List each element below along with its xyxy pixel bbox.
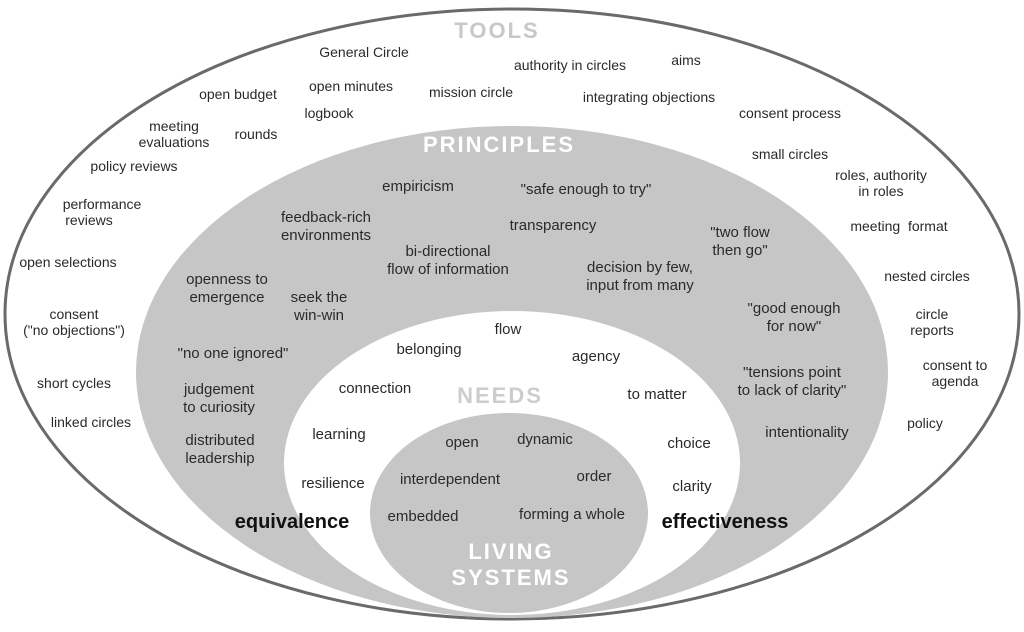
principles labels: "safe enough to try" xyxy=(521,181,651,198)
principles labels: "good enough xyxy=(748,300,840,317)
heading: living systems: LIVING xyxy=(468,539,554,564)
needs labels: connection xyxy=(339,380,411,397)
tools labels: in roles xyxy=(858,183,904,199)
needs labels: choice xyxy=(667,435,711,452)
tools labels: ("no objections") xyxy=(23,322,125,338)
tools labels: aims xyxy=(671,52,701,68)
tools labels: open selections xyxy=(19,254,117,270)
needs labels: agency xyxy=(572,348,621,365)
tools labels: meeting format xyxy=(850,218,948,234)
tools labels: General Circle xyxy=(319,44,409,60)
emphasized words: effectiveness xyxy=(662,511,788,533)
principles labels: then go" xyxy=(712,242,768,259)
principles labels: distributed xyxy=(185,432,255,449)
principles labels: intentionality xyxy=(765,424,849,441)
needs labels xyxy=(301,321,712,495)
tools labels: mission circle xyxy=(429,84,513,100)
principles labels: leadership xyxy=(185,450,255,467)
principles labels xyxy=(178,178,849,467)
needs labels: clarity xyxy=(672,478,712,495)
living systems labels xyxy=(388,431,625,525)
principles labels: to curiosity xyxy=(183,399,255,416)
heading: tools: TOOLS xyxy=(454,18,540,43)
tools labels: roles, authority xyxy=(835,167,927,183)
heading: living systems: SYSTEMS xyxy=(451,565,571,590)
tools labels: linked circles xyxy=(51,414,131,430)
tools labels: integrating objections xyxy=(583,89,715,105)
tools labels: circle xyxy=(916,306,949,322)
tools labels: short cycles xyxy=(37,375,111,391)
tools labels: reviews xyxy=(65,212,113,228)
emphasized words: equivalence xyxy=(235,511,349,533)
principles labels: feedback-rich xyxy=(281,209,371,226)
principles labels: judgement xyxy=(183,381,255,398)
needs labels: belonging xyxy=(396,341,462,358)
tools labels: reports xyxy=(910,322,954,338)
heading: living systems xyxy=(451,539,571,590)
tools labels: meeting xyxy=(149,118,199,134)
tools labels: logbook xyxy=(304,105,355,121)
living systems labels: open xyxy=(445,434,479,451)
tools labels: consent process xyxy=(739,105,841,121)
living systems labels: forming a whole xyxy=(519,506,625,523)
tools labels: policy reviews xyxy=(90,158,178,174)
tools labels: performance xyxy=(63,196,142,212)
tools labels: authority in circles xyxy=(514,57,626,73)
principles labels: openness to xyxy=(186,271,268,288)
needs labels: to matter xyxy=(627,386,687,403)
principles labels: "tensions point xyxy=(743,364,842,381)
tools labels: nested circles xyxy=(884,268,970,284)
tools labels: consent xyxy=(49,306,99,322)
principles labels: flow of information xyxy=(387,261,509,278)
living systems labels: embedded xyxy=(388,508,458,525)
principles labels: decision by few, xyxy=(587,259,693,276)
principles labels: to lack of clarity" xyxy=(738,382,846,399)
needs ellipse xyxy=(284,311,740,615)
tools labels: agenda xyxy=(932,373,979,389)
tools labels: consent to xyxy=(923,357,988,373)
principles labels: "no one ignored" xyxy=(178,345,288,362)
tools labels: policy xyxy=(907,415,943,431)
tools labels: open budget xyxy=(199,86,277,102)
tools labels: evaluations xyxy=(139,134,209,150)
principles labels: win-win xyxy=(293,307,344,324)
tools labels: open minutes xyxy=(309,78,393,94)
emphasized words xyxy=(235,511,788,533)
principles labels: input from many xyxy=(586,277,694,294)
living systems labels: interdependent xyxy=(400,471,501,488)
principles ellipse xyxy=(136,126,888,618)
living systems ellipse xyxy=(370,413,648,613)
tools labels xyxy=(19,44,988,431)
principles labels: seek the xyxy=(291,289,347,306)
principles labels: bi-directional xyxy=(405,243,491,260)
needs labels: resilience xyxy=(301,475,365,492)
principles labels: "two flow xyxy=(710,224,770,241)
principles labels: for now" xyxy=(767,318,821,335)
principles labels: transparency xyxy=(510,217,597,234)
principles labels: environments xyxy=(281,227,371,244)
principles labels: empiricism xyxy=(382,178,454,195)
heading: needs: NEEDS xyxy=(457,383,543,408)
needs labels: learning xyxy=(312,426,366,443)
living systems labels: dynamic xyxy=(517,431,573,448)
needs labels: flow xyxy=(495,321,521,338)
tools labels: small circles xyxy=(752,146,828,162)
living systems labels: order xyxy=(576,468,612,485)
tools labels: rounds xyxy=(235,126,277,142)
principles labels: emergence xyxy=(189,289,265,306)
heading: principles: PRINCIPLES xyxy=(423,132,575,157)
